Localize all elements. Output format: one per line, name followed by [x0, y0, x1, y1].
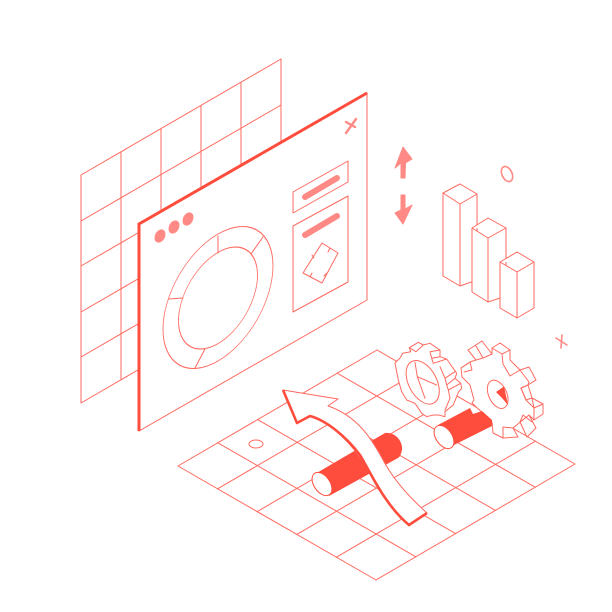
cylinder left	[308, 433, 402, 499]
up arrow	[395, 147, 412, 178]
small cross	[556, 335, 567, 348]
tall bar	[443, 184, 477, 286]
small info card	[293, 161, 348, 213]
ticket icon	[303, 243, 338, 283]
cylinder right	[430, 408, 492, 452]
close icon	[346, 119, 356, 133]
short bar	[500, 252, 534, 318]
bar chart	[443, 184, 534, 318]
curved arrow	[283, 390, 427, 525]
dashboard window panel	[139, 93, 367, 431]
donut chart	[163, 202, 273, 393]
back grid panel	[81, 59, 281, 403]
floor grid	[178, 350, 575, 580]
large info card	[293, 196, 348, 312]
window dots	[152, 210, 196, 245]
small ring	[499, 165, 515, 183]
gear left	[395, 342, 462, 417]
down arrow	[395, 195, 412, 224]
gear right	[461, 341, 543, 438]
floor ring	[249, 440, 263, 448]
middle bar	[472, 218, 506, 302]
